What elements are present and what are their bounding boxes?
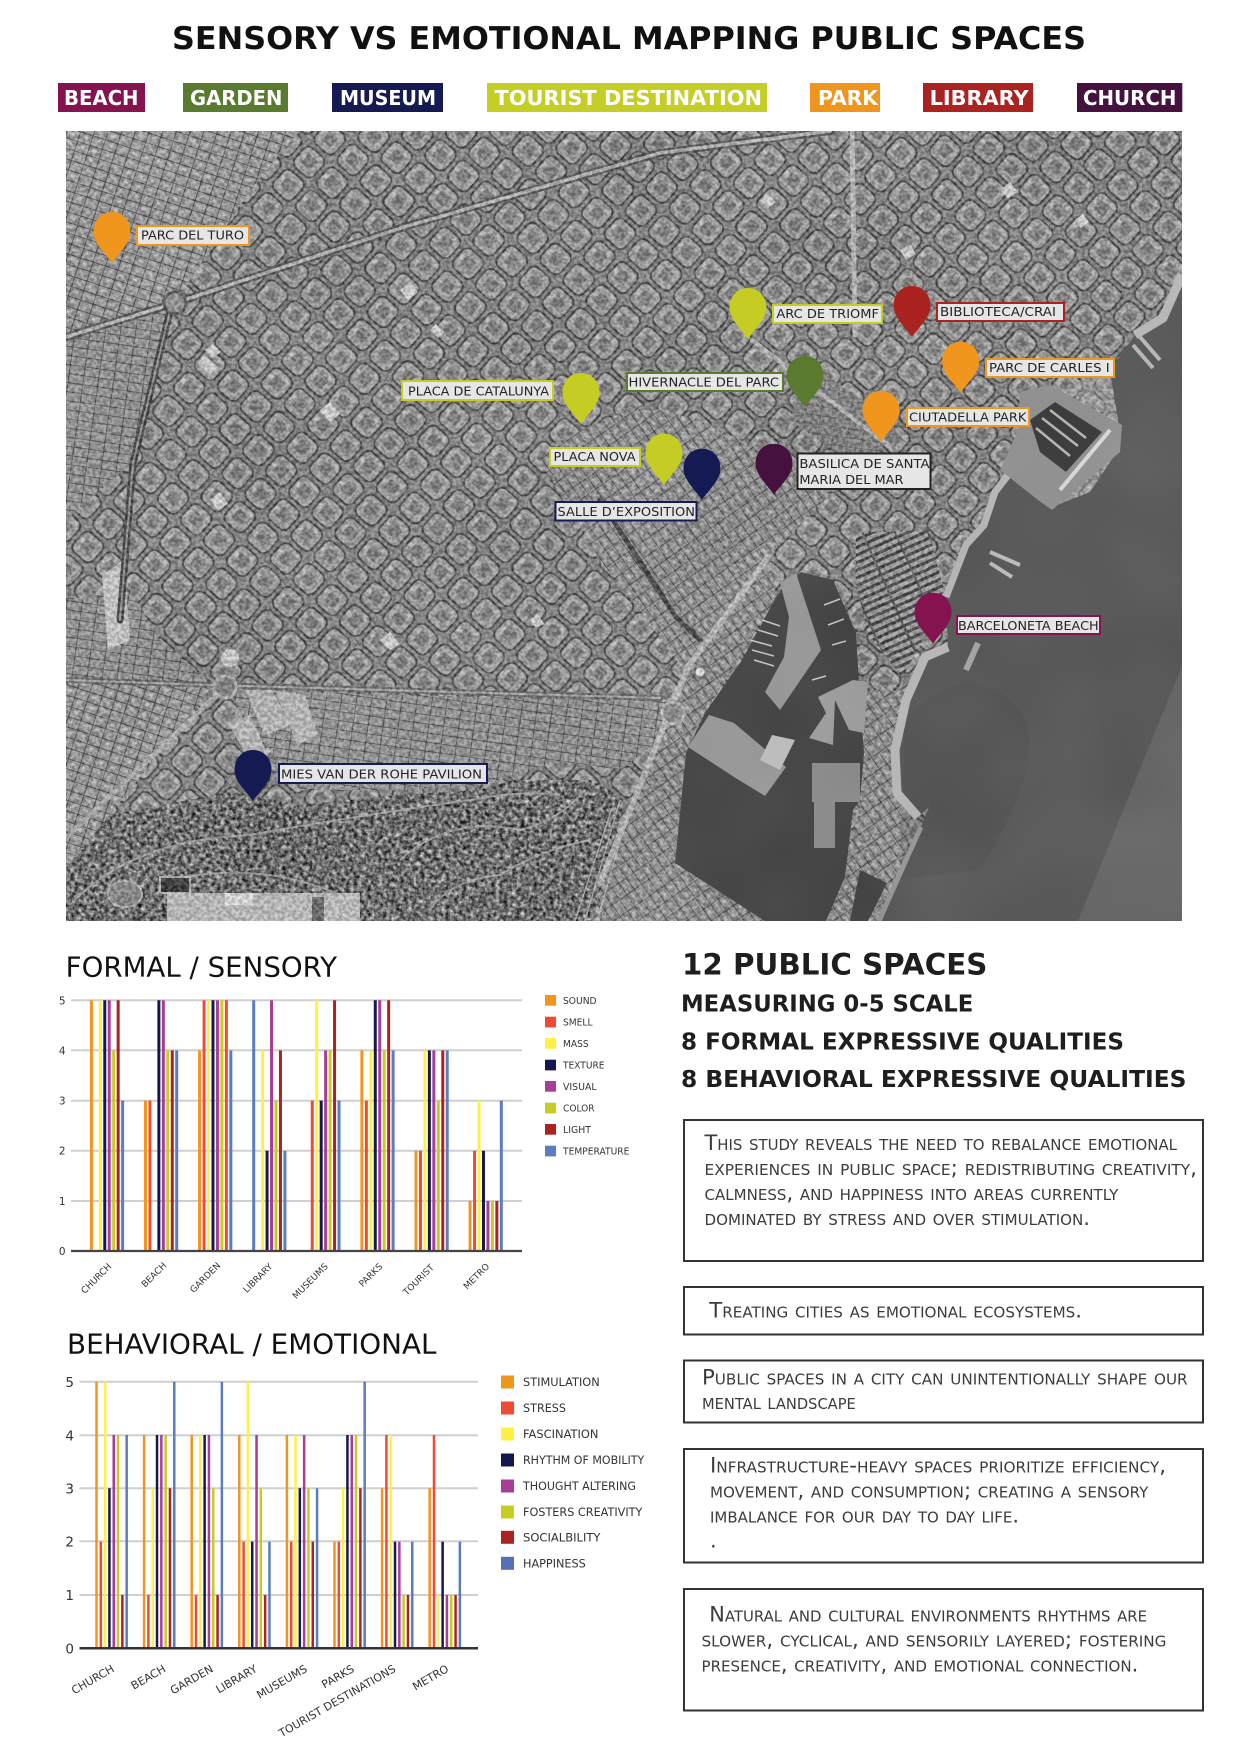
pin: Basilica de Santa Maria del Mar <box>756 444 792 495</box>
text box: natural and cultural rhythms: Natural and cultural environments rhythms are <box>709 1603 1147 1627</box>
bar chart: formal / sensory: GARDEN <box>189 1261 223 1296</box>
category: library: LIBRARY <box>930 86 1030 110</box>
heading: behavioral / emotional: BEHAVIORAL / EMOTIONAL <box>67 1328 437 1360</box>
legend: formal / sensory: TEXTURE <box>562 1061 604 1072</box>
pin: Placa Nova <box>646 434 682 485</box>
bar chart: behavioral / emotional: 0 <box>65 1642 74 1658</box>
bar chart: behavioral / emotional: BEACH <box>129 1662 168 1692</box>
label: Placa de Catalunya: PLACA DE CATALUNYA <box>408 384 549 399</box>
category: museum: MUSEUM <box>340 86 436 110</box>
key facts block <box>681 947 1186 1093</box>
text box: natural and cultural rhythms <box>684 1589 1203 1710</box>
bar chart: formal / sensory: PARKS <box>358 1262 385 1290</box>
legend: behavioral / emotional: STIMULATION <box>523 1375 600 1389</box>
label: Barceloneta Beach: BARCELONETA BEACH <box>958 619 1099 634</box>
bar chart: formal / sensory: CHURCH <box>80 1262 114 1296</box>
legend: behavioral / emotional: FASCINATION <box>523 1427 598 1441</box>
label: Basilica de Santa Maria del Mar: MARIA DEL MAR <box>799 473 904 488</box>
text box: natural and cultural rhythms: presence, creativity, and emotional connection. <box>702 1653 1138 1677</box>
heading: formal / sensory: FORMAL / SENSORY <box>66 952 337 984</box>
sea <box>879 275 1182 921</box>
bar chart: behavioral / emotional: PARKS <box>319 1662 357 1691</box>
label: Arc de Triomf: ARC DE TRIOMF <box>776 307 879 322</box>
label: Salle d'Exposition: SALLE D’EXPOSITION <box>558 505 695 520</box>
legend: formal / sensory: SOUND <box>563 996 597 1007</box>
key facts block: MEASURING 0-5 SCALE <box>681 992 973 1018</box>
bar chart: formal / sensory: TOURIST <box>401 1263 437 1299</box>
text box: infrastructure-heavy spaces: movement, and consumption; creating a sensory <box>710 1479 1149 1503</box>
label: Hivernacle del Parc: HIVERNACLE DEL PARC <box>628 375 779 390</box>
category: beach: BEACH <box>64 86 138 110</box>
category: tourist destination: TOURIST DESTINATION <box>494 86 762 110</box>
bar chart: formal / sensory: 2 <box>59 1146 66 1158</box>
text box: mental landscape: mental landscape <box>702 1390 856 1414</box>
key facts block: 8 FORMAL EXPRESSIVE QUALITIES <box>681 1030 1124 1056</box>
bar chart: formal / sensory: LIBRARY <box>242 1262 275 1295</box>
bar chart: behavioral / emotional: 5 <box>65 1375 74 1391</box>
legend: formal / sensory: COLOR <box>563 1104 595 1115</box>
legend: formal / sensory <box>545 995 629 1158</box>
text box: infrastructure-heavy spaces: . <box>710 1529 717 1553</box>
pin: Ciutadella Park <box>862 391 900 442</box>
bar chart: behavioral / emotional: 1 <box>65 1588 74 1604</box>
pin: Parc del Turo <box>94 212 130 263</box>
pin: Hivernacle del Parc <box>786 356 824 407</box>
bar chart: formal / sensory: 1 <box>59 1196 66 1208</box>
category: garden: GARDEN <box>190 86 282 110</box>
text box: emotional ecosystems: Treating cities as emotional ecosystems. <box>708 1299 1082 1323</box>
text box: infrastructure-heavy spaces <box>684 1449 1203 1562</box>
text box: study finding: calmness, and happiness into areas currently <box>704 1181 1119 1205</box>
bar chart: formal / sensory: 0 <box>59 1246 66 1258</box>
pin: Parc de Carles I <box>942 342 979 393</box>
text box: infrastructure-heavy spaces: Infrastructure-heavy spaces prioritize efficiency, <box>710 1454 1166 1478</box>
bar chart: formal / sensory: MUSEUMS <box>291 1262 331 1302</box>
pin: Biblioteca/CRAI <box>894 286 930 337</box>
map panel: aerial view of Barcelona <box>66 131 1182 921</box>
bar chart: formal / sensory: BEACH <box>140 1261 169 1290</box>
pin: Arc de Triomf <box>730 288 766 339</box>
text box: study finding <box>684 1120 1203 1261</box>
text box: mental landscape: Public spaces in a city can unintentionally shape our <box>702 1365 1188 1389</box>
pin: Salle d'Exposition <box>684 449 720 500</box>
legend: behavioral / emotional: FOSTERS CREATIVITY <box>523 1505 642 1519</box>
key facts block: 12 PUBLIC SPACES <box>682 947 987 981</box>
bar chart: behavioral / emotional: 2 <box>65 1534 74 1550</box>
legend: formal / sensory: SMELL <box>563 1018 593 1029</box>
bar chart: behavioral / emotional: TOURIST DESTINATIONS <box>276 1662 398 1740</box>
legend: formal / sensory: TEMPERATURE <box>562 1147 629 1158</box>
label: Basilica de Santa Maria del Mar <box>798 454 930 489</box>
legend: formal / sensory: VISUAL <box>563 1082 597 1093</box>
bar chart: behavioral / emotional: MUSEUMS <box>255 1662 310 1702</box>
label: Placa Nova: PLACA NOVA <box>554 450 636 465</box>
legend: behavioral / emotional: RHYTHM OF MOBILITY <box>523 1453 644 1467</box>
legend: behavioral / emotional <box>501 1375 644 1570</box>
title: SENSORY VS EMOTIONAL MAPPING PUBLIC SPACES <box>172 21 1086 57</box>
pin: Mies van der Rohe Pavilion <box>234 750 272 801</box>
bar chart: behavioral / emotional: LIBRARY <box>214 1662 260 1696</box>
bar chart: behavioral / emotional: CHURCH <box>69 1662 116 1697</box>
key facts block: 8 BEHAVIORAL EXPRESSIVE QUALITIES <box>681 1067 1186 1093</box>
legend: formal / sensory: MASS <box>563 1039 589 1050</box>
legend: behavioral / emotional: THOUGHT ALTERING <box>522 1479 636 1493</box>
text box: emotional ecosystems <box>684 1287 1203 1334</box>
bar chart: formal / sensory: 3 <box>59 1096 66 1108</box>
bar chart: behavioral / emotional: 3 <box>65 1482 74 1498</box>
label: Mies van der Rohe Pavilion: MIES VAN DER ROHE PAVILION <box>281 767 482 782</box>
legend: behavioral / emotional: HAPPINESS <box>523 1556 586 1570</box>
label: Parc de Carles I: PARC DE CARLES I <box>989 361 1110 376</box>
legend: behavioral / emotional: STRESS <box>523 1401 566 1415</box>
pin: Barceloneta Beach <box>914 593 952 644</box>
pin: Placa de Catalunya <box>562 373 600 424</box>
legend: behavioral / emotional: SOCIALBILITY <box>523 1530 601 1544</box>
bar chart: behavioral / emotional: GARDEN <box>168 1662 216 1697</box>
label: Basilica de Santa Maria del Mar: BASILICA DE SANTA <box>799 457 930 472</box>
bar chart: behavioral / emotional: METRO <box>410 1662 451 1693</box>
text box: infrastructure-heavy spaces: imbalance for our day to day life. <box>710 1504 1019 1528</box>
text box: study finding: This study reveals the need to rebalance emotional <box>704 1131 1178 1155</box>
legend: place categories <box>58 83 1182 112</box>
bar chart: behavioral / emotional: 4 <box>65 1428 74 1444</box>
category: church: CHURCH <box>1083 86 1176 110</box>
category: park: PARK <box>818 86 879 110</box>
bar chart: formal / sensory: 5 <box>59 995 66 1007</box>
label: Parc del Turo: PARC DEL TURO <box>141 228 244 243</box>
legend: formal / sensory: LIGHT <box>563 1125 591 1136</box>
bar chart: formal / sensory <box>59 995 522 1302</box>
fine land grain <box>66 131 1182 921</box>
text box: mental landscape <box>684 1360 1203 1422</box>
text box: study finding: experiences in public space; redistributing creativity, <box>704 1156 1197 1180</box>
bar chart: behavioral / emotional <box>65 1375 478 1740</box>
label: Ciutadella Park: CIUTADELLA PARK <box>909 410 1027 425</box>
bar chart: formal / sensory: METRO <box>462 1262 492 1292</box>
text box: study finding: dominated by stress and over stimulation. <box>704 1206 1090 1230</box>
label: Biblioteca/CRAI: BIBLIOTECA/CRAI <box>940 305 1056 320</box>
text box: natural and cultural rhythms: slower, cyclical, and sensorily layered; fostering <box>702 1628 1166 1652</box>
bar chart: formal / sensory: 4 <box>59 1045 66 1057</box>
